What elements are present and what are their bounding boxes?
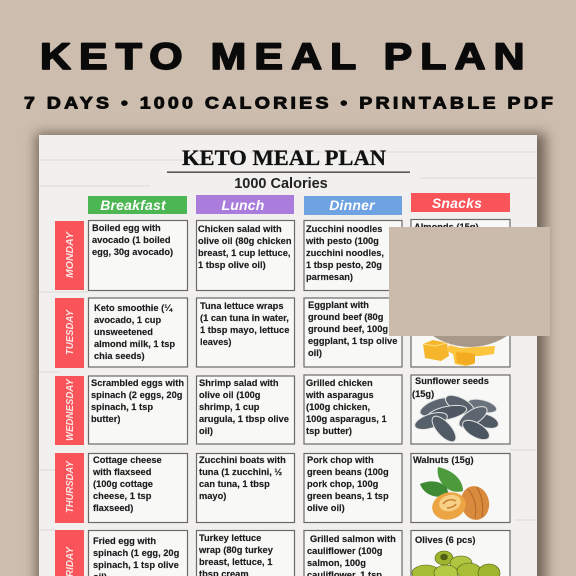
Thursday breakfast: (100g cottage [93,479,153,489]
Wednesday snack: Sunflower seeds [415,376,489,386]
Wednesday lunch: olive oil (100g [199,390,261,400]
Monday breakfast: Boiled egg with [92,223,161,233]
main title: KETO MEAL PLAN [40,35,525,77]
Thursday dinner: pork chop, 100g [307,479,379,489]
Friday dinner: salmon, 100g [307,558,366,568]
Thursday lunch: mayo) [199,491,226,501]
Tuesday dinner: ground beef (80g [308,312,384,322]
Monday breakfast: egg, 30g avocado) [92,247,173,257]
Friday dinner: Grilled salmon with [310,534,396,544]
Wednesday dinner: with asparagus [305,390,374,400]
panel: meal plan sheet [39,135,537,576]
Monday snack [411,220,510,290]
Friday breakfast: Fried egg with [93,536,156,546]
Monday dinner: parmesan) [306,272,353,282]
header: Dinner: Dinner [329,197,376,213]
Tuesday dinner: ground beef, 100g [308,324,388,334]
Thursday breakfast: cheese, 1 tsp [93,491,152,501]
Thursday breakfast: Cottage cheese [93,455,162,465]
subtitle: 7 DAYS • 1000 CALORIES • PRINTABLE PDF [24,93,553,112]
header: Lunch [196,195,294,214]
Thursday lunch: Zucchini boats with [199,455,286,465]
Wednesday lunch: arugula, 1 tbsp olive [199,414,289,424]
Thursday lunch: can tuna, 1 tbsp [199,479,270,489]
Friday dinner: cauliflower (100g [307,546,383,556]
Tuesday lunch [196,298,294,367]
header: Breakfast [88,196,187,214]
Wednesday dinner: 100g asparagus, 1 [306,414,387,424]
day tab: Friday [55,530,84,576]
Wednesday dinner: (100g chicken, [306,402,370,412]
Tuesday dinner: oil) [308,348,322,358]
icon: sunflower seeds [413,391,500,446]
Monday breakfast: avocado (1 boiled [92,235,171,245]
Thursday breakfast: flaxseed) [93,503,133,513]
Thursday dinner: green beans (100g [307,467,389,477]
header: Breakfast: Breakfast [100,197,167,213]
sheet title: KETO MEAL PLAN [182,145,386,170]
Friday snack: Olives (6 pcs) [415,535,475,545]
header: Dinner [304,196,402,215]
Wednesday breakfast: spinach (2 eggs, 20g [91,390,183,400]
Wednesday breakfast: Scrambled eggs with [91,378,184,388]
Tuesday lunch: leaves) [200,337,232,347]
Monday dinner: 1 tbsp pesto, 20g [306,260,382,270]
Wednesday lunch: shrimp, 1 cup [199,402,260,412]
icon: walnuts with leaves [420,467,492,523]
Thursday lunch: tuna (1 zucchini, ½ [199,467,282,477]
Monday breakfast [88,220,188,290]
day tab: Tuesday: TUESDAY [65,309,76,355]
Tuesday dinner: Eggplant with [308,300,369,310]
Monday lunch [196,220,294,290]
Thursday breakfast: with flaxseed [92,467,152,477]
Wednesday snack [411,375,510,446]
Monday lunch: breast, 1 cup lettuce, [198,248,290,258]
Monday lunch: olive oil (80g chicken [198,236,292,246]
Thursday dinner [304,454,402,522]
Tuesday lunch: 1 tbsp mayo, lettuce [200,325,289,335]
day tab: Thursday [55,453,84,523]
Monday lunch: Chicken salad with [198,224,282,234]
Tuesday breakfast: avocado, 1 cup [94,315,161,325]
Monday dinner: with pesto (100g [305,236,379,246]
Wednesday dinner [304,375,402,444]
day tab: Wednesday: WEDNESDAY [65,378,76,441]
Friday breakfast: spinach, 1 tsp olive [93,560,179,570]
header: Snacks: Snacks [432,195,482,211]
icon: cheese [423,330,507,366]
Tuesday breakfast: unsweetened [94,327,153,337]
Wednesday lunch [196,376,294,444]
day tab: Wednesday [55,376,84,445]
day tab: Monday: MONDAY [65,231,76,278]
Monday snack: Almonds (15g) [414,222,479,232]
Tuesday dinner: eggplant, 1 tsp olive [308,336,397,346]
sheet subtitle: 1000 Calories [234,176,328,192]
Wednesday dinner: tsp butter) [306,426,352,436]
header: Lunch: Lunch [222,197,264,213]
Thursday dinner: olive oil) [307,503,345,513]
Wednesday breakfast: spinach, 1 tsp [91,402,153,412]
Friday lunch: Turkey lettuce [199,533,261,543]
Thursday breakfast [88,454,188,522]
Monday lunch: 1 tbsp olive oil) [198,260,266,270]
Thursday snack [411,454,510,523]
Wednesday lunch: oil) [199,426,213,436]
cover block [389,227,550,336]
Friday snack [411,530,510,576]
Tuesday breakfast [88,298,188,367]
Thursday snack: Walnuts (15g) [413,455,474,465]
Wednesday dinner: Grilled chicken [306,378,373,388]
Friday lunch: breast, lettuce, 1 [199,557,272,567]
Tuesday lunch: Tuna lettuce wraps [200,301,284,311]
Tuesday snack [411,298,510,367]
Friday lunch [196,530,294,576]
Tuesday lunch: (1 can tuna in water, [200,313,289,323]
Friday lunch: wrap (80g turkey [198,545,274,555]
Monday dinner: zucchini noodles, [306,248,384,258]
icon: olives [412,551,500,576]
Friday breakfast: spinach (1 egg, 20g [93,548,180,558]
Tuesday dinner [304,298,402,367]
day tab: Monday [55,221,84,290]
Wednesday breakfast: butter) [91,414,120,424]
Friday dinner [304,530,402,576]
Thursday lunch [196,454,294,522]
day tab: Tuesday [55,298,84,368]
Wednesday breakfast [88,376,188,444]
Friday breakfast [88,530,188,576]
day tab: Thursday: THURSDAY [65,460,76,513]
Monday dinner: Zucchini noodles [306,224,382,234]
Thursday dinner: green beans, 1 tsp [307,491,389,501]
header: Snacks [411,193,510,212]
Tuesday breakfast: Keto smoothie (¼ [94,303,173,313]
Wednesday lunch: Shrimp salad with [199,378,279,388]
Wednesday snack: (15g) [412,389,434,399]
Thursday dinner: Pork chop with [307,455,374,465]
Tuesday breakfast: almond milk, 1 tsp [94,339,175,349]
Tuesday breakfast: chia seeds) [94,351,145,361]
Monday dinner [304,220,402,290]
page shadow [36,133,546,576]
